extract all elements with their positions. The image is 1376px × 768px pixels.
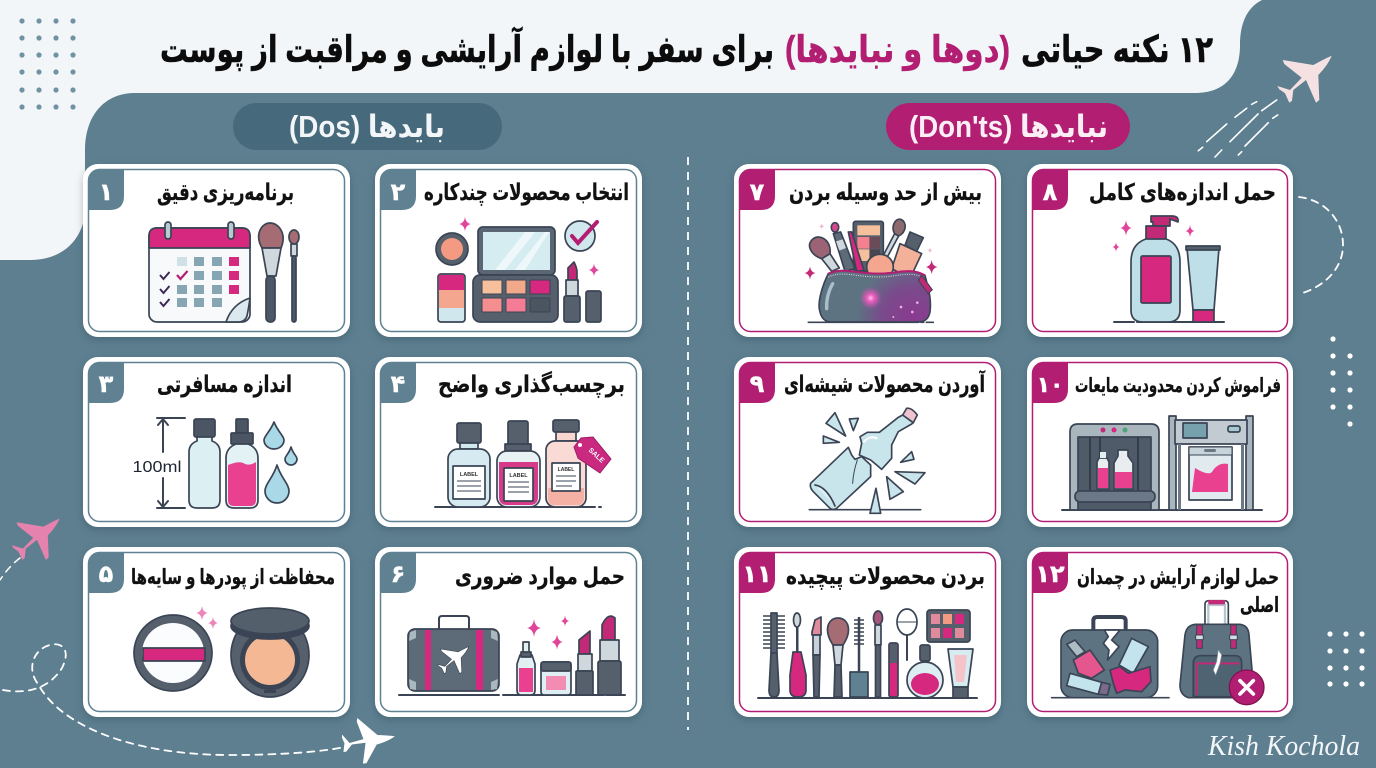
icon: multi-use palette	[436, 217, 601, 322]
panel: card 1	[83, 164, 350, 337]
badge 5: ۵	[99, 561, 113, 588]
badge 2	[381, 170, 416, 210]
card frame 9	[734, 357, 1001, 527]
panel: card 7	[734, 164, 1001, 337]
icon: airport scanner and liquids bag	[1062, 416, 1262, 510]
icon: powder compacts	[134, 606, 309, 697]
badge 6: ۶	[391, 561, 405, 588]
card frame 6	[375, 547, 642, 717]
icon: suitcase and essentials	[399, 616, 625, 695]
heading 6: حمل موارد ضروری	[455, 563, 625, 590]
card frame 8	[1027, 164, 1293, 337]
title	[160, 26, 1213, 72]
icon: broken suitcase and backpack	[1052, 600, 1264, 705]
badge 6	[381, 553, 416, 593]
header light shape	[0, 0, 1262, 260]
card frame 10	[1027, 357, 1293, 527]
heading pill: Don'ts: نبایدها (Don'ts)	[909, 109, 1108, 144]
card frame 12	[1027, 547, 1293, 717]
heading 3: اندازه مسافرتی	[157, 371, 292, 398]
heading 12: حمل لوازم آرایش در چمدان	[1077, 564, 1279, 589]
heading 5: محفاظت از پودرها و سایه‌ها	[131, 566, 335, 589]
dot grid: bottom right	[1327, 631, 1365, 687]
icon: white plane bottom	[335, 712, 395, 768]
heading 12: اصلی	[1240, 594, 1279, 617]
card frame 11	[734, 547, 1001, 717]
badge 3: ۳	[99, 371, 114, 398]
badge 10	[1033, 363, 1068, 403]
badge 1: ۱	[99, 179, 113, 206]
badge 10: ۱۰	[1037, 372, 1063, 397]
badge 4	[381, 363, 416, 403]
card frame 1	[83, 164, 350, 337]
plane trail bottom	[3, 644, 345, 755]
card frame 2	[375, 164, 642, 337]
badge 11	[740, 553, 775, 593]
badge 7	[740, 170, 775, 210]
heading pill: Dos: بایدها (Dos)	[289, 109, 445, 144]
heading 8: حمل اندازه‌های کامل	[1089, 179, 1276, 206]
icon: travel size bottles: 100ml	[132, 459, 182, 476]
title: (دوها و نبایدها)	[785, 29, 1010, 71]
icon: labelled bottles: LABEL	[509, 473, 528, 479]
center dashed divider	[687, 157, 689, 730]
icon: labelled bottles: LABEL	[460, 472, 479, 478]
panel: card 8	[1027, 164, 1293, 337]
panel: card 10	[1027, 357, 1293, 527]
heading 12	[1077, 564, 1279, 617]
icon: many complex tools	[758, 609, 977, 698]
badge 11: ۱۱	[742, 561, 772, 588]
heading 7: بیش از حد وسیله بردن	[789, 179, 982, 206]
dot grid: top left	[19, 18, 76, 110]
title: ۱۲ نکته حیاتی	[1021, 29, 1213, 70]
icon: travel size bottles	[132, 418, 297, 508]
icon: labelled bottles: LABEL	[558, 467, 574, 473]
watermark signature: Kish Kochola	[1207, 730, 1360, 762]
badge 4: ۴	[391, 371, 405, 398]
badge 2: ۲	[391, 179, 406, 206]
card frame 7	[734, 164, 1001, 337]
icon: broken glass bottle	[809, 408, 925, 513]
icon: pink plane left	[12, 518, 60, 560]
heading pill: Dos	[233, 103, 502, 150]
heading 4: برچسب‌گذاری واضح	[438, 371, 625, 398]
panel: card 3	[83, 357, 350, 527]
badge 12	[1033, 553, 1068, 593]
badge 3	[89, 363, 124, 403]
badge 8: ۸	[1043, 179, 1058, 206]
icon: overfull makeup bag	[804, 219, 938, 322]
icon: calendar and brushes	[149, 222, 299, 322]
icon: labelled bottles: SALE	[587, 447, 606, 465]
heading 1: برنامه‌ریزی دقیق	[157, 179, 294, 206]
panel: card 6	[375, 547, 642, 717]
icon: labelled bottles	[435, 420, 611, 507]
dot grid: right middle	[1330, 336, 1353, 427]
panel: card 11	[734, 547, 1001, 717]
badge 5	[89, 553, 124, 593]
badge 12: ۱۲	[1035, 561, 1065, 588]
heading 11: بردن محصولات پیچیده	[786, 563, 985, 590]
panel: card 2	[375, 164, 642, 337]
icon: pale plane top right	[1277, 56, 1332, 103]
heading pill: Don'ts	[886, 103, 1130, 150]
panel: card 12	[1027, 547, 1293, 717]
badge 8	[1033, 170, 1068, 210]
panel: card 4	[375, 357, 642, 527]
panel: card 9	[734, 357, 1001, 527]
heading 10: فراموش کردن محدودیت مایعات	[1075, 375, 1281, 397]
plane trail left	[0, 558, 20, 580]
plane trails top right	[1198, 100, 1278, 157]
card frame 3	[83, 357, 350, 527]
card frame 5	[83, 547, 350, 717]
heading 9: آوردن محصولات شیشه‌ای	[784, 369, 986, 398]
panel: card 5	[83, 547, 350, 717]
badge 7: ۷	[750, 179, 765, 206]
badge 9	[740, 363, 775, 403]
card frame 4	[375, 357, 642, 527]
title: برای سفر با لوازم آرایشی و مراقبت از پوست	[160, 26, 774, 72]
icon: full size bottle and tube	[1112, 216, 1224, 322]
dashed arc right	[1299, 197, 1343, 294]
heading 2: انتخاب محصولات چندکاره	[424, 179, 629, 206]
badge 9: ۹	[750, 371, 765, 398]
badge 1	[89, 170, 124, 210]
